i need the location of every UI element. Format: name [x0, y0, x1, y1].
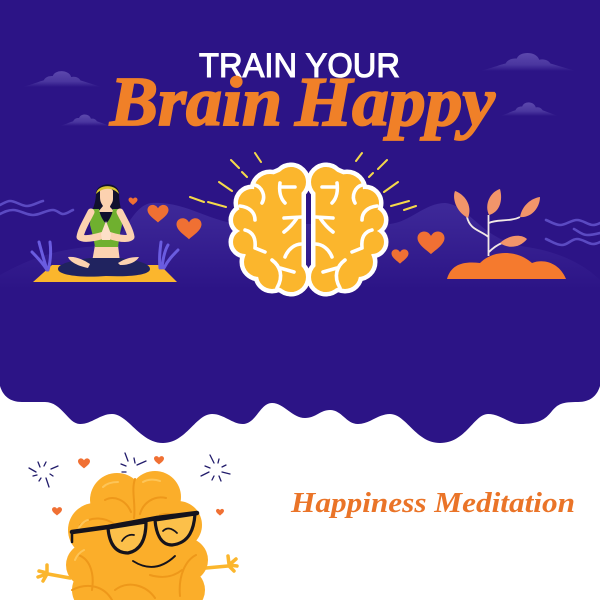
sparkle right — [201, 455, 230, 481]
illustration: meditating woman — [32, 184, 178, 282]
hair — [91, 184, 122, 222]
feet — [68, 257, 139, 268]
crossed legs — [58, 258, 150, 277]
heart medium — [148, 205, 168, 222]
brain highlights — [75, 480, 160, 560]
glasses — [72, 513, 197, 567]
cloud: upper left — [23, 71, 101, 87]
background hills — [0, 203, 600, 290]
closed eyes — [122, 529, 177, 541]
sparkle centre — [121, 453, 146, 472]
hearts right — [392, 231, 444, 264]
plants beside mat — [32, 242, 178, 270]
right hemisphere — [311, 167, 384, 292]
midriff — [92, 245, 120, 262]
hearts — [52, 456, 224, 516]
illustration: happy brain mascot — [29, 453, 237, 600]
illustration: growing plant — [447, 189, 566, 279]
illustration: central brain — [233, 167, 384, 292]
cloud: upper right — [480, 53, 576, 71]
yoga mat — [33, 265, 177, 282]
title — [109, 47, 496, 141]
heart small — [392, 249, 408, 264]
cloud: lower left — [60, 114, 110, 126]
face and neck — [98, 188, 115, 212]
green top — [90, 209, 122, 247]
cloud: lower right — [500, 102, 558, 116]
arms — [80, 212, 131, 238]
brain folds — [72, 479, 196, 600]
wave lines right — [546, 220, 600, 245]
heading: train your: TRAIN YOUR — [199, 47, 400, 85]
smile — [133, 556, 175, 567]
subheading: happiness meditation: Happiness Meditation — [290, 487, 575, 519]
left hemisphere — [233, 167, 306, 292]
heart small — [128, 197, 138, 205]
brain body — [66, 471, 208, 600]
headband — [96, 186, 119, 194]
purple dripping header background — [0, 0, 600, 443]
praying hands — [101, 221, 111, 240]
sparkle left — [29, 462, 58, 487]
soil mound — [447, 253, 566, 279]
sparkles — [29, 453, 230, 487]
light rays — [190, 153, 416, 210]
stems — [467, 215, 520, 256]
hearts left — [128, 197, 202, 239]
clouds — [23, 53, 576, 126]
heading: brain happy: Happy — [294, 64, 496, 141]
heading: brain happy: Brain — [109, 64, 282, 141]
leaves — [454, 189, 540, 247]
heart large — [176, 218, 202, 239]
heart large — [418, 231, 444, 254]
wave lines left — [0, 201, 73, 215]
arms and hands — [38, 556, 237, 581]
